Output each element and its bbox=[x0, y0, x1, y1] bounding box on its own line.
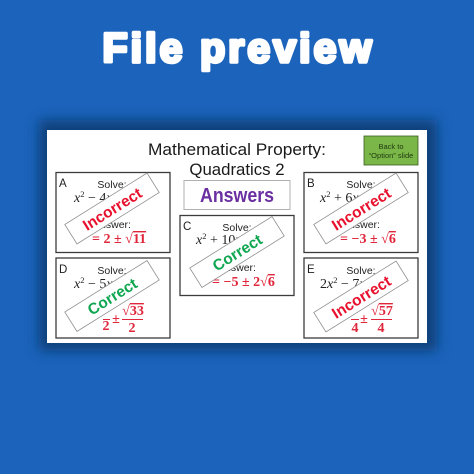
panel: question A: Answer: bbox=[93, 219, 131, 231]
stamp: incorrect: Incorrect bbox=[80, 185, 145, 235]
panel: question E: 2 bbox=[333, 275, 337, 285]
button: back to option slide: Back to bbox=[378, 142, 404, 151]
panel: question B bbox=[304, 172, 418, 252]
answer fraction: 2 bbox=[102, 319, 110, 334]
stamp: incorrect: Incorrect bbox=[329, 273, 394, 323]
panel: question E: − 7 bbox=[337, 277, 359, 292]
panel: question D: x bbox=[105, 277, 113, 292]
panel: question E: x bbox=[358, 277, 366, 292]
panel: slide bbox=[47, 130, 427, 343]
panel: question D: Solve: bbox=[97, 265, 127, 277]
panel: question E: 2x bbox=[320, 277, 333, 292]
panel: question D: x bbox=[73, 277, 81, 292]
slide shadow bbox=[39, 120, 437, 351]
panel: question A: 2 bbox=[80, 189, 84, 199]
title: File preview bbox=[102, 25, 372, 71]
panel: question B: = −3 ± √6 bbox=[340, 232, 396, 247]
panel: question E bbox=[304, 258, 418, 338]
slide heading: Quadratics 2 bbox=[189, 160, 285, 179]
panel: question A: = 2 ± √11 bbox=[92, 232, 146, 247]
answer fraction: 2 bbox=[128, 321, 136, 336]
slide heading: Mathematical Property: bbox=[148, 140, 326, 159]
answer fraction bbox=[351, 304, 393, 336]
panel: question D: D bbox=[59, 264, 67, 276]
panel: question C: 2 bbox=[202, 231, 206, 241]
panel: question C: C bbox=[183, 221, 191, 233]
stamp: incorrect: Incorrect bbox=[329, 185, 394, 235]
panel: question A: − 4 bbox=[84, 191, 106, 206]
panel: question C bbox=[180, 216, 294, 296]
slide heading bbox=[148, 140, 326, 179]
panel: question B: x bbox=[319, 191, 327, 206]
panel: question C: x bbox=[234, 233, 242, 248]
answer fraction: √57 bbox=[371, 304, 393, 319]
panel: question D: 2 bbox=[80, 275, 84, 285]
panel: question B: x bbox=[351, 191, 359, 206]
panel: question D bbox=[56, 258, 170, 338]
panel: question C: Answer: bbox=[218, 262, 256, 274]
panel: question B: Answer: bbox=[342, 219, 380, 231]
stamp: correct: Correct bbox=[210, 231, 266, 275]
answer fraction: ± bbox=[360, 312, 368, 327]
stamp: correct: Correct bbox=[85, 275, 141, 319]
panel: question B: B bbox=[307, 178, 315, 190]
panel: question A: A bbox=[59, 178, 67, 190]
answer fraction bbox=[102, 304, 144, 336]
panel: question C: + 10 bbox=[206, 233, 235, 248]
panel: question C: Solve: bbox=[222, 222, 252, 234]
panel: question B: + 6 bbox=[330, 191, 352, 206]
panel: question A: Solve: bbox=[97, 179, 127, 191]
answers banner bbox=[184, 180, 290, 210]
panel: question C: = −5 ± 2√6 bbox=[212, 275, 275, 290]
panel: question E: E bbox=[307, 264, 315, 276]
panel: question A: x bbox=[105, 191, 113, 206]
answer fraction: 4 bbox=[352, 321, 358, 336]
panel: question A bbox=[56, 172, 170, 252]
panel: question A: x bbox=[73, 191, 81, 206]
panel: question C: x bbox=[195, 233, 203, 248]
panel: question D: − 5 bbox=[84, 277, 106, 292]
answer fraction: 4 bbox=[378, 321, 384, 336]
panel: question B: Solve: bbox=[346, 179, 376, 191]
panel: question B: 2 bbox=[326, 189, 330, 199]
answer fraction: √33 bbox=[122, 304, 144, 319]
answers banner: Answers bbox=[200, 184, 274, 207]
answer fraction: ± bbox=[112, 312, 120, 327]
button: back to option slide: “Option” slide bbox=[369, 151, 413, 160]
panel: question E: Solve: bbox=[346, 265, 376, 277]
button: back to option slide bbox=[364, 136, 418, 165]
